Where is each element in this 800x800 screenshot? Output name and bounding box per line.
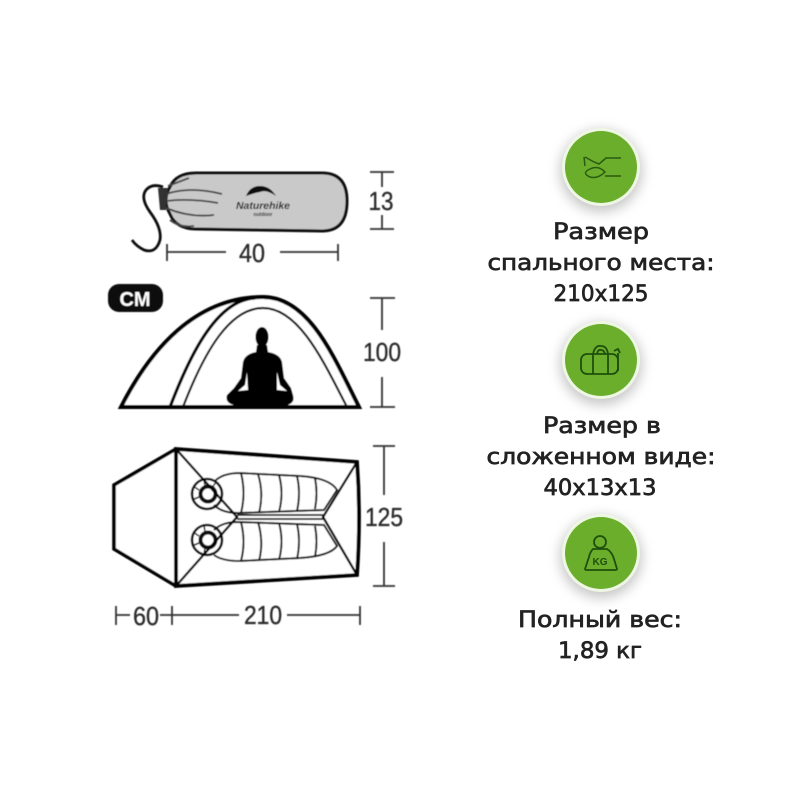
label: sleeping area: спального места: [488, 251, 714, 276]
dimension: tent height 100: 100 [363, 337, 401, 367]
dimension: bag length 40 [167, 238, 338, 268]
label: sleeping area: 210x125 [554, 282, 648, 307]
unit badge: CM: CM [119, 289, 151, 311]
diagram panel: tent dimensions [108, 172, 403, 631]
dimension: tent height 100 [363, 298, 401, 407]
label: total weight: 1,89 кг [558, 639, 642, 664]
icon: kg weight [560, 514, 642, 598]
label: total weight [518, 608, 682, 664]
label: sleeping area [488, 220, 714, 307]
bag logo [236, 186, 290, 218]
dimension: floor width 125 [365, 446, 403, 586]
sleeping bag: bottom [192, 522, 337, 561]
dimension: vestibule 60 and length 210: 210 [244, 600, 282, 630]
spec: total weight [518, 514, 682, 664]
dimension: bag height 13 [368, 172, 394, 229]
icon: sleeping person [560, 128, 642, 212]
tent floor plan [114, 449, 359, 586]
label: packed size: 40x13x13 [544, 476, 656, 501]
spec: sleeping area [488, 128, 714, 307]
bag logo: Naturehike [236, 200, 290, 212]
label: packed size: сложенном виде: [486, 445, 716, 470]
label: packed size [486, 414, 716, 501]
person silhouette [227, 327, 294, 406]
dimension: vestibule 60 and length 210: 60 [133, 601, 159, 631]
icon: duffel bag [560, 321, 642, 405]
dimension: bag length 40: 40 [239, 238, 265, 268]
bag logo: outdoor [254, 212, 272, 218]
packed tent bag [132, 173, 347, 251]
tent side view [121, 297, 359, 407]
icon: kg weight: KG [592, 557, 608, 568]
dimension: floor width 125: 125 [365, 502, 403, 532]
label: packed size: Размер в [543, 414, 661, 439]
spec: packed size [486, 321, 716, 501]
unit badge: CM [108, 284, 163, 312]
label: total weight: Полный вес: [518, 608, 682, 633]
dimension: bag height 13: 13 [368, 186, 394, 216]
sleeping bag: top [192, 473, 337, 513]
label: sleeping area: Размер [553, 220, 649, 245]
dimension: vestibule 60 and length 210 [116, 600, 360, 631]
